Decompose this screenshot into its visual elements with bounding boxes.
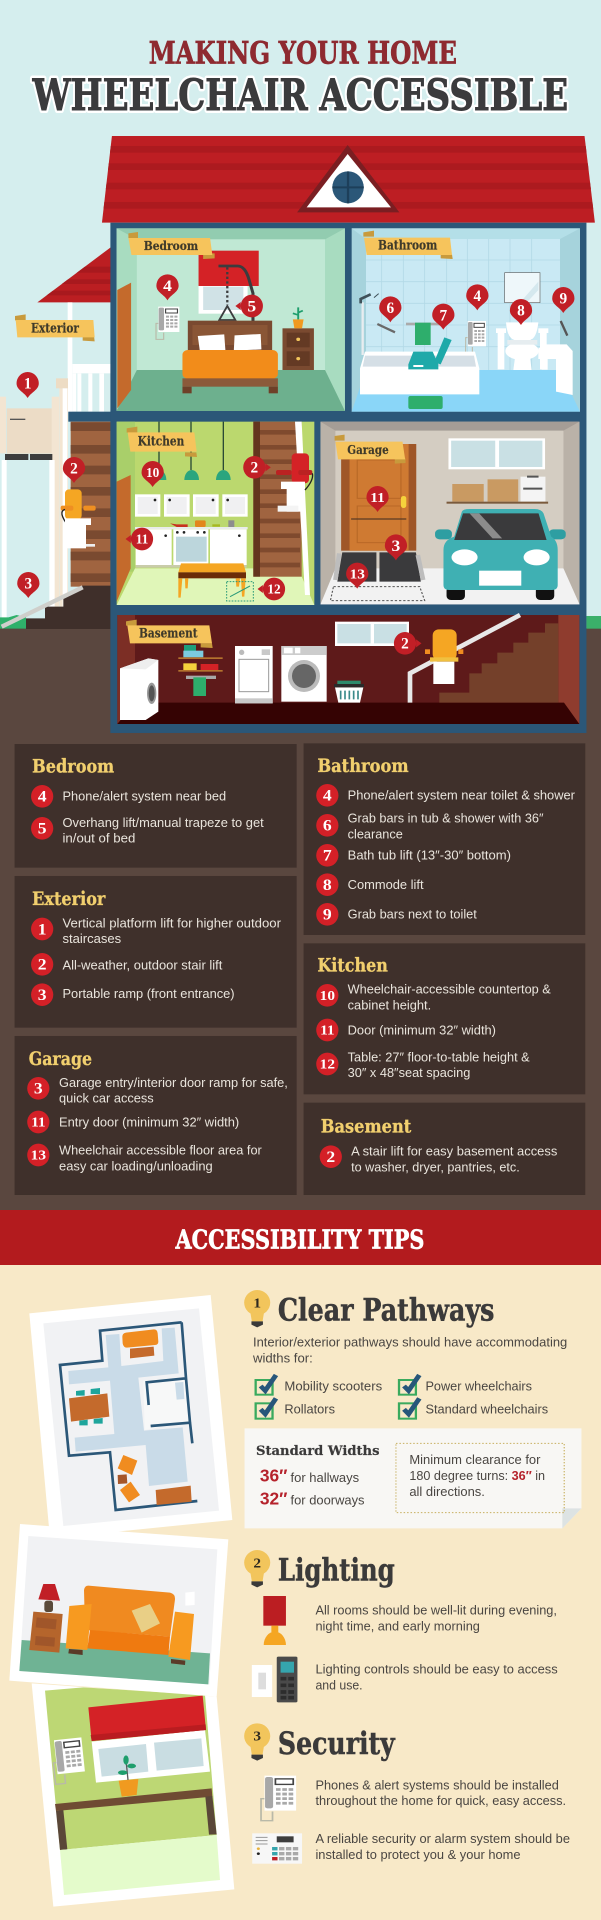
panel: exterior: Vertical platform lift for higher outdoor <box>62 916 281 930</box>
gable window <box>297 145 399 212</box>
tip 2 bulb: 2 <box>253 1556 261 1571</box>
pin 5 bedroom: 5 <box>247 297 256 315</box>
panel: bedroom <box>15 744 297 868</box>
pin 11 kitchen <box>126 528 153 550</box>
house frame <box>110 223 586 733</box>
pin 11 kitchen: 11 <box>136 532 148 547</box>
dishwasher <box>235 646 273 703</box>
portable ramp <box>2 587 83 627</box>
background: sky <box>0 0 601 630</box>
panel: bathroom: Bathroom <box>317 754 409 777</box>
bath mat <box>408 396 443 409</box>
pots on counter <box>170 520 234 527</box>
banner: accessibility tips <box>0 1210 601 1265</box>
banner: Kitchen <box>127 427 197 457</box>
pin 4 bathroom <box>466 284 488 310</box>
heading: clear pathways: Clear Pathways <box>278 1292 494 1328</box>
pin 3 garage <box>385 534 407 560</box>
panel: kitchen: 30″ x 48″seat spacing <box>348 1066 470 1080</box>
minimum clearance note: 180 degree turns: 36″ in <box>409 1469 545 1483</box>
right side grass <box>586 616 601 629</box>
window with red blind <box>199 251 259 314</box>
panel: kitchen: 11 <box>320 1024 335 1038</box>
shelves <box>178 645 223 696</box>
pin 10 <box>142 461 164 487</box>
banner: Garage <box>335 435 406 464</box>
laundry basket <box>334 681 364 703</box>
exterior stair lift <box>61 489 96 548</box>
room: garage <box>320 422 580 604</box>
panel: bathroom: clearance <box>348 827 403 841</box>
photo: sofa room <box>9 1524 228 1697</box>
shower <box>361 294 379 355</box>
door <box>117 475 131 602</box>
panel: exterior: 3 <box>38 986 47 1004</box>
walls <box>60 1322 197 1510</box>
panel: bathroom: 9 <box>323 906 332 923</box>
panel: basement: 2 <box>326 1148 335 1166</box>
note card: standard widths <box>245 1428 581 1528</box>
pin 1 <box>17 372 39 398</box>
stair rail <box>410 615 520 703</box>
phone <box>466 321 486 354</box>
pin 13: 13 <box>350 568 365 582</box>
tip 2 bulb <box>244 1550 270 1587</box>
checklist: Power wheelchairs <box>425 1380 532 1393</box>
panel: kitchen: Wheelchair-accessible countertop & <box>348 983 551 996</box>
tips section bottom <box>244 1550 570 1864</box>
photo: security window scene <box>32 1683 234 1907</box>
banner: Bedroom: Bedroom <box>144 240 198 254</box>
grass <box>0 615 26 629</box>
pin 9: 9 <box>559 291 567 308</box>
panel: garage <box>15 1036 297 1195</box>
pin 2 exterior <box>63 457 85 483</box>
brick wall <box>71 422 111 587</box>
panel: kitchen: 10 <box>320 989 335 1004</box>
table <box>178 563 246 598</box>
panel: bathroom: Commode lift <box>348 878 424 892</box>
note card: standard widths: Standard Widths <box>256 1444 379 1459</box>
table <box>55 1788 217 1850</box>
pin 2 kitchen: 2 <box>250 460 258 477</box>
banner: Bathroom: Bathroom <box>378 238 438 253</box>
roof <box>100 136 598 223</box>
stairs <box>253 422 310 595</box>
table spacing marker <box>227 582 253 601</box>
porch post and railing <box>68 302 111 412</box>
wall cabinets <box>135 494 248 517</box>
security text 2: installed to protect you & your home <box>315 1848 521 1862</box>
side washer <box>120 658 158 720</box>
note card: standard widths: 32″ <box>260 1489 287 1509</box>
background: ground <box>0 628 601 1214</box>
panel: bathroom: 8 <box>323 876 332 894</box>
security text 2: A reliable security or alarm system should be <box>315 1832 570 1846</box>
heading: security: Security <box>278 1725 395 1761</box>
pin 11 garage <box>366 486 389 512</box>
panel: basement: A stair lift for easy basement access <box>351 1144 557 1158</box>
security text 1: Phones & alert systems should be installed <box>315 1778 559 1792</box>
icon: lamp <box>263 1596 286 1645</box>
lighting text 2 <box>315 1663 558 1692</box>
checklist: Standard wheelchairs <box>425 1402 548 1416</box>
pathways intro text: widths for: <box>252 1351 313 1365</box>
mirror <box>505 273 540 303</box>
furniture <box>69 1329 192 1505</box>
pin 2 basement: 2 <box>401 636 409 653</box>
panel: bathroom: Grab bars in tub & shower with 36″ <box>348 811 544 825</box>
shelf with boxes <box>447 477 548 504</box>
panel: basement <box>304 1103 585 1195</box>
pin 12 <box>258 578 285 600</box>
pin 4 bedroom: 4 <box>163 277 172 295</box>
room: basement <box>117 615 579 724</box>
panel: bedroom: Bedroom <box>32 755 114 777</box>
panel: exterior: 2 <box>38 956 47 973</box>
lighting text 2: and use. <box>315 1679 363 1692</box>
counter and oven <box>135 527 248 568</box>
panel: garage: Garage <box>29 1047 92 1070</box>
title <box>32 35 568 120</box>
washing machine <box>281 646 327 702</box>
heading: lighting: Lighting <box>278 1552 395 1588</box>
panel: bedroom: 5 <box>38 820 47 837</box>
phone <box>156 307 179 339</box>
car <box>435 509 566 600</box>
vertical platform lift <box>0 378 68 620</box>
panel: bathroom <box>304 743 585 935</box>
panel: garage: easy car loading/unloading <box>59 1159 213 1173</box>
stairs <box>439 623 558 703</box>
panel: bathroom: 7 <box>323 847 332 864</box>
checklist <box>256 1375 548 1419</box>
bathtub <box>360 352 479 394</box>
panel: kitchen: 12 <box>320 1058 335 1072</box>
floor area marker <box>330 587 425 601</box>
lighting text 1: night time, and early morning <box>315 1619 480 1633</box>
panel: bathroom: Bath tub lift (13″-30″ bottom) <box>348 849 511 862</box>
tip 1 bulb: 1 <box>253 1296 261 1311</box>
banner: accessibility tips: ACCESSIBILITY TIPS <box>175 1224 424 1255</box>
pin 10: 10 <box>146 465 160 480</box>
banner: Kitchen: Kitchen <box>138 434 184 449</box>
lower floors scene <box>320 422 601 629</box>
table lamp <box>38 1584 60 1612</box>
panel: exterior: Exterior <box>32 887 106 910</box>
icon: alarm panel <box>252 1833 302 1864</box>
title: MAKING YOUR HOME <box>149 35 457 71</box>
panel: bathroom: Phone/alert system near toilet & shower <box>348 788 575 802</box>
note card: standard widths: for doorways <box>291 1494 365 1507</box>
door <box>117 283 131 408</box>
pin 3 exterior: 3 <box>24 576 32 593</box>
pin 4 bathroom: 4 <box>473 288 481 305</box>
pin 3 exterior <box>17 572 39 598</box>
entrance stairs <box>26 586 111 629</box>
pin 13 <box>346 563 368 589</box>
pin 2 basement <box>394 632 421 655</box>
tip 1 bulb <box>244 1290 270 1327</box>
tub lift <box>408 337 452 369</box>
pin 11 garage: 11 <box>370 491 385 506</box>
panel: kitchen: Table: 27″ floor-to-table height & <box>348 1050 530 1064</box>
panel: garage: Entry door (minimum 32″ width) <box>59 1115 239 1129</box>
ramp <box>335 552 423 582</box>
nightstand and plant <box>282 307 314 370</box>
panel: exterior: Portable ramp (front entrance) <box>62 987 235 1001</box>
overhang lift and trapeze <box>218 266 253 324</box>
tip 3 bulb: 3 <box>253 1730 261 1744</box>
wall switch <box>185 1592 195 1606</box>
pin 6: 6 <box>386 300 394 317</box>
panel: bedroom: Overhang lift/manual trapeze to get <box>62 816 264 830</box>
security text 2 <box>315 1832 570 1862</box>
panel: kitchen: cabinet height. <box>348 999 431 1012</box>
panel: garage: Wheelchair accessible floor area for <box>59 1143 262 1157</box>
banner: Bathroom <box>363 231 453 259</box>
basement window <box>335 622 409 646</box>
pin 2 exterior: 2 <box>70 461 78 478</box>
panel: kitchen: Kitchen <box>317 954 388 976</box>
header and upper floor scene <box>32 35 598 733</box>
panel: garage: quick car access <box>59 1092 154 1105</box>
pin 2 kitchen <box>243 456 271 479</box>
panel: bathroom: Grab bars next to toilet <box>348 908 477 921</box>
panel: garage: 13 <box>31 1149 46 1163</box>
pin 1: 1 <box>24 376 32 393</box>
lighting text 1 <box>315 1604 557 1633</box>
sofa <box>66 1586 194 1665</box>
wall grab bar <box>561 321 567 336</box>
panel: exterior: 1 <box>38 920 47 938</box>
panel: kitchen: Door (minimum 32″ width) <box>348 1024 496 1037</box>
legend panels <box>15 743 585 1195</box>
grab bar <box>377 324 395 332</box>
panel: basement: to washer, dryer, pantries, etc. <box>351 1160 520 1174</box>
pin 6 <box>379 296 401 322</box>
banner: Basement <box>126 620 213 648</box>
panel: kitchen <box>304 943 585 1094</box>
plant <box>118 1755 138 1797</box>
pin 9 <box>552 287 574 313</box>
minimum clearance note: all directions. <box>409 1485 485 1499</box>
pin 4 bedroom <box>156 274 179 300</box>
photo: floor plan <box>29 1295 232 1538</box>
banner: Basement: Basement <box>139 626 198 641</box>
panel: garage: Garage entry/interior door ramp for safe, <box>59 1076 288 1090</box>
lighting text 2: Lighting controls should be easy to access <box>315 1663 558 1676</box>
panel: bathroom: 4 <box>323 787 332 804</box>
background: tips section <box>0 1270 601 1920</box>
checklist: Mobility scooters <box>284 1380 382 1393</box>
pendant lamps <box>152 422 231 480</box>
sink <box>538 344 573 395</box>
pin 5 bedroom <box>235 295 263 317</box>
minimum clearance note <box>396 1443 564 1513</box>
tips section top <box>0 1210 601 1528</box>
panel: bedroom: 4 <box>38 788 47 805</box>
basement stair lift <box>425 629 463 684</box>
note card: standard widths: 36″ <box>260 1466 287 1486</box>
panel: bedroom: Phone/alert system near bed <box>62 789 226 803</box>
nightstand <box>29 1612 63 1653</box>
banner: Garage: Garage <box>347 444 389 458</box>
note card: standard widths: for hallways <box>291 1471 359 1485</box>
towel and bar <box>406 323 440 345</box>
porch roof <box>37 247 112 302</box>
commode lift and toilet <box>496 322 548 370</box>
banner: Bedroom <box>128 232 215 259</box>
lighting text 1: All rooms should be well-lit during evening, <box>315 1604 557 1617</box>
minimum clearance note: Minimum clearance for <box>409 1453 541 1467</box>
garage window <box>448 438 545 469</box>
panel: bathroom: 6 <box>323 817 332 834</box>
floor <box>60 1835 220 1895</box>
checklist: Rollators <box>284 1402 335 1416</box>
icon: phone <box>261 1776 296 1821</box>
phone on wall <box>51 1737 86 1784</box>
banner: Exterior <box>15 314 95 341</box>
banner: Exterior: Exterior <box>31 320 79 335</box>
room: kitchen <box>117 422 314 605</box>
pin 3 garage: 3 <box>392 537 400 555</box>
panel: exterior <box>15 876 297 1028</box>
room: bedroom <box>117 228 345 411</box>
pathways intro text <box>252 1336 567 1365</box>
pin 8 <box>510 299 532 325</box>
panel: exterior: All-weather, outdoor stair lift <box>62 958 223 972</box>
pathways intro text: Interior/exterior pathways should have accommodating <box>253 1336 567 1349</box>
security text 1: throughout the home for quick, easy access. <box>315 1794 566 1808</box>
tip 3 bulb <box>244 1723 270 1761</box>
panel: exterior: staircases <box>62 932 121 946</box>
door <box>341 444 416 551</box>
exterior scene <box>0 247 112 629</box>
panel: bedroom: in/out of bed <box>62 831 135 845</box>
pin 7: 7 <box>439 307 447 324</box>
panel: basement: Basement <box>321 1115 412 1137</box>
window and blind <box>88 1696 210 1783</box>
panel: garage: 11 <box>31 1116 46 1130</box>
room: bathroom <box>352 228 580 412</box>
icon: light switch and remote <box>252 1657 297 1702</box>
pin 7 <box>432 304 454 330</box>
pin 8: 8 <box>517 303 525 320</box>
porch floor <box>68 412 112 422</box>
panel: garage: 3 <box>34 1080 43 1097</box>
bed <box>182 321 278 393</box>
security text 1 <box>315 1778 566 1808</box>
tip photos <box>9 1295 234 1907</box>
pin 12: 12 <box>267 582 281 597</box>
indoor stair lift <box>276 453 313 512</box>
